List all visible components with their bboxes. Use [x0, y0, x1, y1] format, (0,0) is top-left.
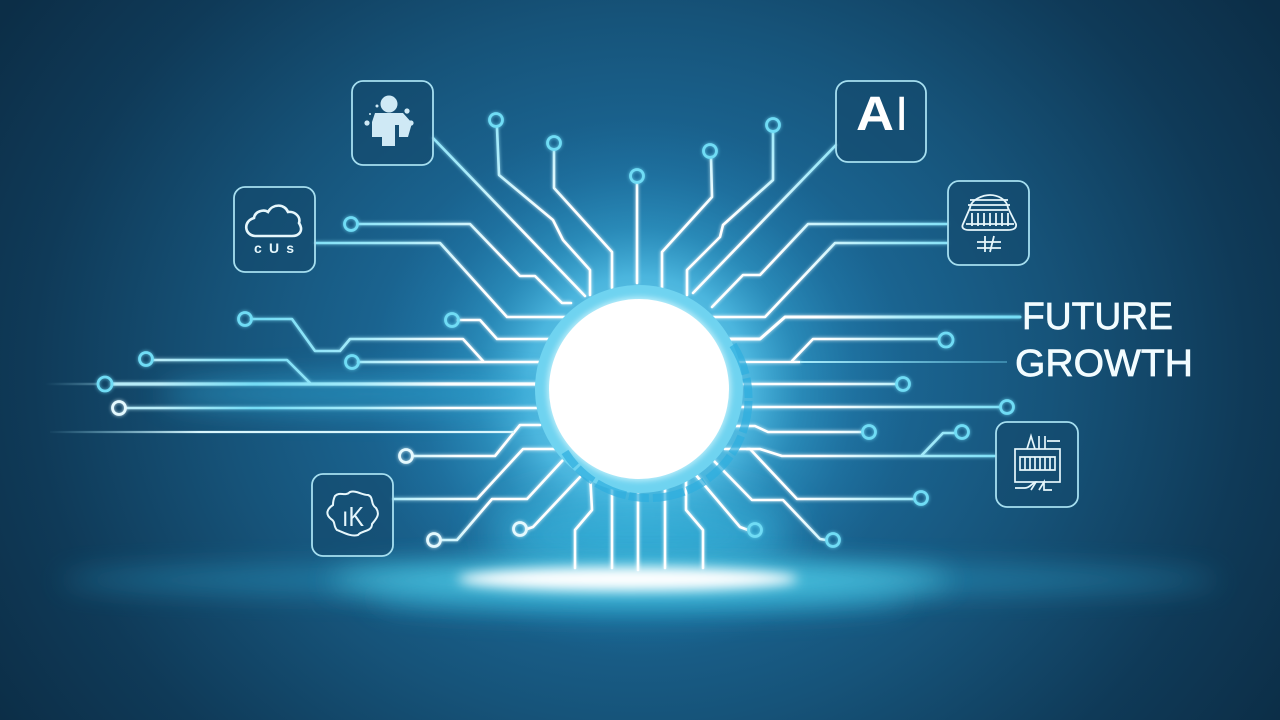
hub segmented ring shading	[565, 345, 749, 498]
trace group: bottom	[575, 473, 703, 570]
title: future growth	[1015, 296, 1193, 385]
icon: building	[948, 181, 1029, 265]
title line: growth: GROWTH	[1015, 343, 1193, 385]
left light streak	[160, 377, 580, 411]
trace group: top right	[693, 145, 947, 317]
letter A: A	[856, 88, 894, 141]
circuit traces	[112, 128, 1020, 570]
floor light band	[60, 493, 1220, 613]
title line: future: FUTURE	[1022, 296, 1173, 338]
hub white core	[549, 299, 729, 479]
faded line to growth	[800, 361, 1007, 363]
hub inner soft edge	[547, 297, 731, 481]
icon: K emblem: ıK	[342, 501, 364, 532]
icon: cloud	[234, 187, 315, 272]
icon: person	[352, 81, 433, 165]
trace group: top left	[315, 128, 612, 317]
central hub	[535, 285, 749, 498]
trace group: left	[112, 319, 552, 408]
trace group: top centre	[637, 132, 773, 295]
trace group: lower left	[393, 425, 580, 540]
left fading tails	[45, 384, 514, 432]
icon: K emblem	[312, 474, 393, 556]
icon: cloud: cUs	[254, 240, 294, 256]
trace end nodes	[98, 114, 1014, 546]
letter I: I	[895, 88, 908, 141]
trace group: lower right	[695, 449, 914, 540]
icon: AI	[836, 81, 926, 162]
trace group: right	[730, 317, 1020, 456]
icon: chip	[996, 422, 1078, 507]
hub outer ring	[535, 285, 743, 493]
central halo glow	[369, 119, 909, 659]
